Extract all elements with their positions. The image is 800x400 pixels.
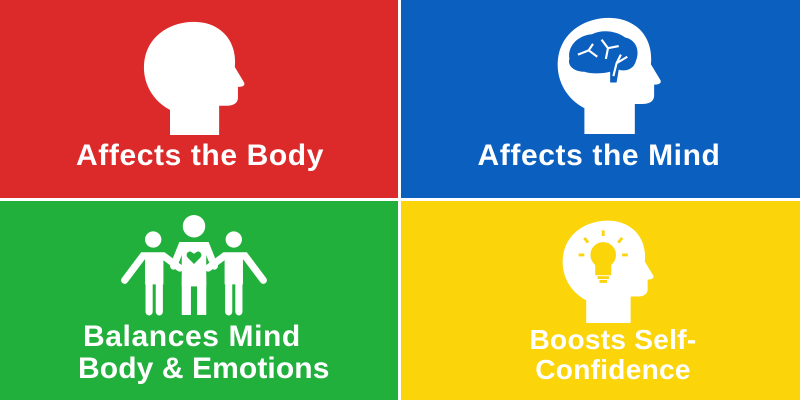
subheading: Body & Emotions: [78, 352, 330, 385]
panel: balances: [0, 201, 398, 400]
icon: head with lightbulb: [562, 220, 654, 323]
heading: Boosts Self-: [530, 324, 696, 355]
heading: Affects the Mind: [478, 139, 720, 172]
heading: Affects the Body: [76, 139, 324, 172]
icon: head: [144, 22, 244, 135]
panel: affects the body: [0, 0, 398, 198]
subheading: Confidence: [535, 354, 691, 385]
panel: affects the mind: [401, 0, 800, 198]
icon: three people: [121, 215, 267, 316]
heading: Balances Mind: [83, 320, 301, 353]
icon: head with brain: [558, 18, 661, 134]
panel: boosts self-confidence: [401, 201, 800, 400]
